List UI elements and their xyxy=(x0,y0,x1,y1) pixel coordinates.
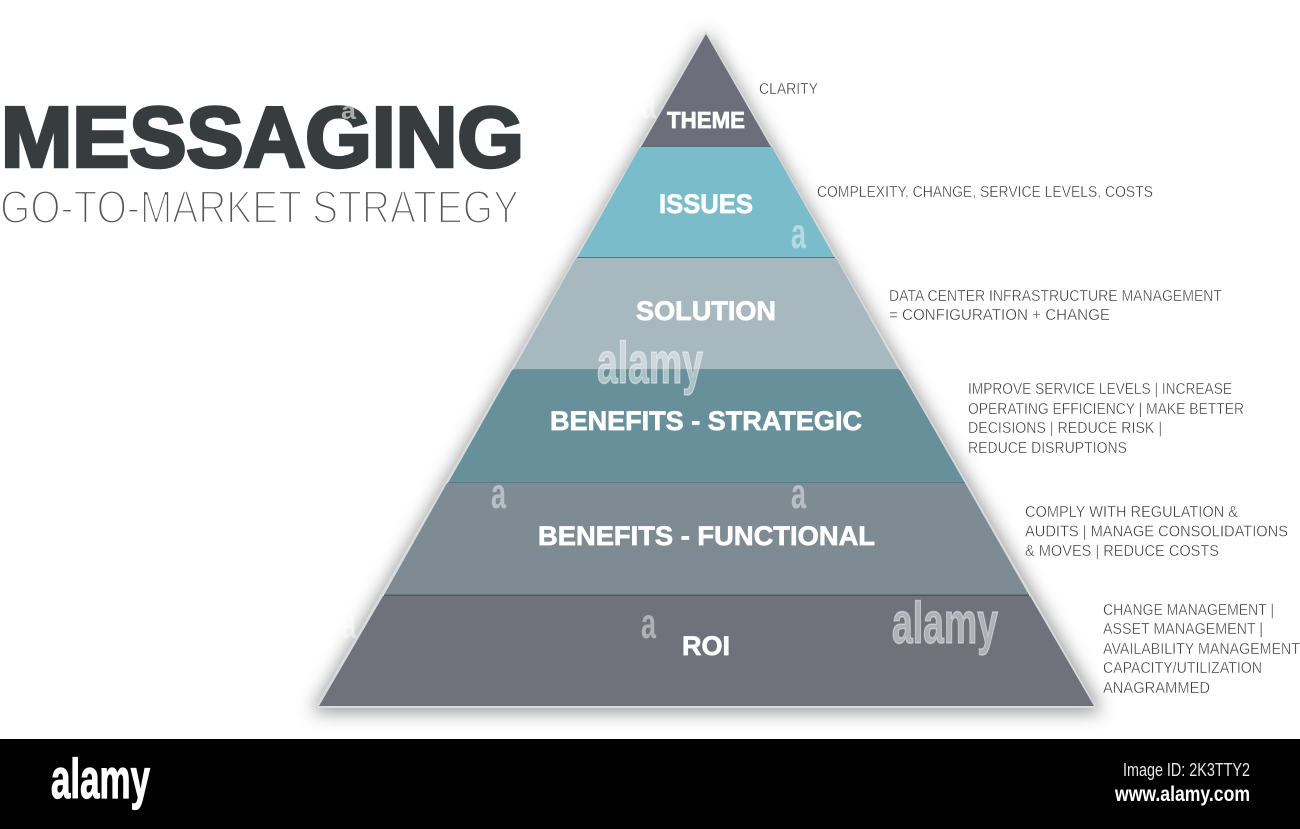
note: benefits strategic: IMPROVE SERVICE LEVELS | INCREASE xyxy=(968,381,1232,398)
layer: benefits functional xyxy=(384,483,1029,596)
note: solution: DATA CENTER INFRASTRUCTURE MANAGEMENT xyxy=(889,288,1222,305)
note: solution: = CONFIGURATION + CHANGE xyxy=(889,307,1110,324)
layer: solution xyxy=(513,258,899,371)
footer bar xyxy=(0,739,1300,829)
layer: issues xyxy=(577,147,835,258)
watermarks: alamy xyxy=(597,331,703,396)
note: benefits functional: & MOVES | REDUCE COSTS xyxy=(1025,543,1219,560)
note: roi: ASSET MANAGEMENT | xyxy=(1103,621,1263,638)
subtitle: go-to-market strategy: GO-TO-MARKET STRATEGY xyxy=(0,181,519,233)
note: benefits strategic: OPERATING EFFICIENCY | MAKE BETTER xyxy=(968,401,1244,418)
note: roi: ANAGRAMMED xyxy=(1103,680,1210,697)
layer: roi: ROI xyxy=(682,631,730,661)
note: roi: CAPACITY/UTILIZATION xyxy=(1103,660,1262,677)
note: benefits strategic: REDUCE DISRUPTIONS xyxy=(968,440,1127,457)
watermarks: a xyxy=(641,600,657,648)
layer: roi xyxy=(319,596,1094,706)
layer: benefits functional: BENEFITS - FUNCTIONAL xyxy=(538,521,875,551)
note: roi: CHANGE MANAGEMENT | xyxy=(1103,602,1274,619)
note: benefits functional xyxy=(1025,504,1288,560)
layer: benefits strategic xyxy=(448,370,965,484)
layer: issues: ISSUES xyxy=(659,189,753,219)
layer: benefits strategic: BENEFITS - STRATEGIC xyxy=(550,406,862,436)
note: issues: COMPLEXITY, CHANGE, SERVICE LEVELS, COSTS xyxy=(817,184,1153,201)
note: benefits strategic: DECISIONS | REDUCE RISK | xyxy=(968,420,1162,437)
watermarks: alamy xyxy=(892,591,998,656)
note: roi xyxy=(1103,602,1300,697)
note: clarity: CLARITY xyxy=(759,81,818,98)
note: benefits strategic xyxy=(968,381,1244,457)
note: solution xyxy=(889,288,1222,324)
watermarks xyxy=(341,80,998,656)
website: www.alamy.com xyxy=(1114,783,1250,806)
layer: theme xyxy=(641,34,771,148)
note: benefits functional: COMPLY WITH REGULATION & xyxy=(1025,504,1238,521)
watermarks: a xyxy=(341,600,357,648)
watermarks: a xyxy=(491,470,507,518)
watermark on title: a xyxy=(341,98,357,125)
image id: Image ID: 2K3TTY2 xyxy=(1123,760,1250,780)
layer: theme: THEME xyxy=(667,107,745,133)
watermarks: a xyxy=(791,210,807,258)
watermarks: a xyxy=(791,470,807,518)
title: messaging: MESSAGING xyxy=(1,90,524,186)
footer logo: alamy xyxy=(51,747,150,810)
watermarks: a xyxy=(641,80,657,128)
pyramid xyxy=(312,31,1102,712)
layer: solution: SOLUTION xyxy=(636,296,776,326)
